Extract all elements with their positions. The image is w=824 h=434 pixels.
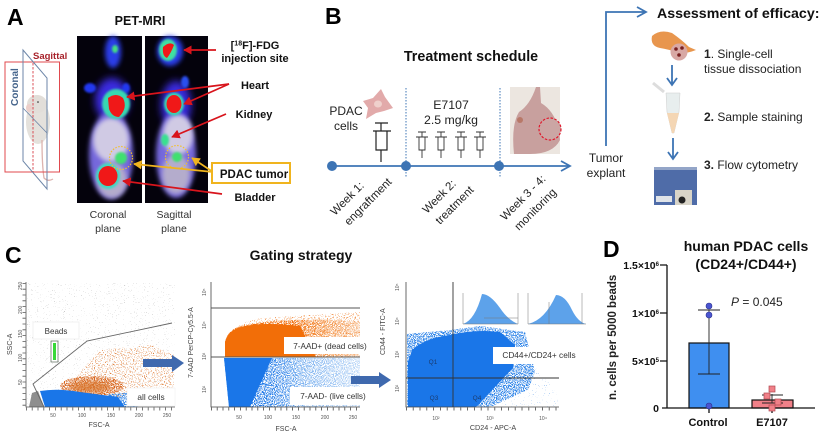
label: Bladder: Bladder [235, 192, 276, 204]
inset histograms [463, 293, 586, 324]
label A: A [7, 4, 24, 30]
axis tick labels: 6 [656, 310, 660, 316]
step 1 text: 1. Single-cell [704, 47, 773, 61]
label: Week 1: Week 1: [329, 180, 367, 218]
label: E7107 dose: E7107 [433, 98, 469, 112]
label: Week 1: engraftment [343, 176, 395, 228]
label: PDAC cells: PDAC [329, 104, 363, 118]
icon: pancreas with tumor [652, 32, 696, 60]
axis labels [7, 281, 171, 429]
annotation: P value: P = 0.045 [731, 295, 783, 309]
callout: PDAC tumor: PDAC tumor [220, 169, 289, 181]
quadrant labels: Q3 [430, 395, 439, 402]
error bars [698, 310, 783, 403]
label: CD44+/CD24+ cells: CD44+/CD24+ cells [502, 350, 576, 360]
axis labels: 10³ [486, 416, 494, 422]
image: coronal PET-MRI [77, 36, 142, 203]
axis labels: 50 [236, 415, 242, 421]
quadrant labels: Q1 [429, 359, 438, 366]
icons: four treatment syringes [416, 132, 486, 158]
panel: A PET-MRI [5, 4, 290, 235]
category labels: Control [688, 417, 728, 429]
label: injection site: [ [231, 40, 234, 52]
label C: C [5, 242, 22, 268]
label: 7-AAD- live cells: 7-AAD- (live cells) [300, 392, 366, 401]
icon: PDAC cell [363, 89, 393, 119]
caption: coronal plane: Coronal [90, 209, 126, 221]
quadrant labels [429, 359, 482, 402]
heading: PET-MRI: PET-MRI [115, 14, 165, 28]
label: injection site: 18 [234, 40, 242, 48]
bar: E7107 [752, 400, 793, 408]
chart title: (CD24+/CD44+) [695, 256, 797, 272]
axis labels: 150 [18, 329, 24, 338]
gate box: beads [33, 322, 79, 362]
caption: sagittal plane: Sagittal [156, 209, 192, 221]
axis labels: 50 [50, 413, 56, 419]
axis labels: 250 [163, 413, 171, 419]
axis tick labels: 0 [653, 403, 659, 415]
label B: B [325, 3, 342, 29]
icon: mouse with coronal and sagittal planes [5, 50, 67, 189]
axis labels: 200 [135, 413, 143, 419]
bar: Control [689, 343, 729, 408]
axis labels: FSC-A [276, 426, 297, 433]
axis labels: 100 [264, 415, 272, 421]
caption: sagittal plane: plane [161, 223, 187, 235]
axis labels: 10³ [395, 350, 401, 358]
label: Week 2: treatment [434, 184, 477, 227]
axis labels: CD24 - APC-A [470, 423, 516, 432]
axis labels: 250 [18, 281, 24, 290]
axis labels: 10⁵ [395, 283, 401, 291]
chart title: human PDAC cells [684, 238, 808, 254]
label: Week 3-4 [499, 173, 559, 233]
label: injection site: injection site [221, 53, 289, 65]
axis labels: SSC-A [7, 333, 14, 355]
callout: PDAC tumor [212, 163, 290, 183]
label: all cells [127, 388, 175, 406]
y axis title: n. cells per 5000 beads [607, 275, 619, 400]
label: Sagittal plane: Sagittal [33, 51, 67, 62]
panel: D bar chart [603, 236, 815, 429]
arrow: explant to assessment [606, 7, 646, 146]
arrow: step 1 to 2 [667, 65, 677, 85]
axis labels: 10² [432, 416, 440, 422]
label: 7-AAD- live cells [290, 387, 376, 405]
axis labels: 150 [292, 415, 300, 421]
caption: coronal plane: plane [95, 223, 121, 235]
label: CD44+/CD24+ cells [493, 347, 585, 364]
axis tick labels [623, 260, 660, 415]
icon: flow cytometer [654, 167, 697, 205]
axis labels: 10³ [202, 352, 208, 360]
plot: 7-AAD vs FSC [188, 282, 376, 433]
axis labels: 50 [18, 379, 24, 385]
label D: D [603, 236, 620, 262]
arrow: plot 1 to 2 [143, 355, 184, 372]
step 3 text: 3. Flow cytometry [704, 158, 798, 172]
panel: C gating strategy [5, 242, 586, 433]
label: Week 2: Week 2: [421, 178, 459, 216]
axis labels: 250 [349, 415, 357, 421]
axis labels: 10⁴ [202, 321, 208, 329]
label: Week 2 [421, 178, 477, 227]
heading: Treatment schedule: Treatment schedule [404, 49, 538, 65]
data points: E7107 [764, 386, 781, 411]
label: all cells: all cells [137, 392, 165, 402]
quadrant labels: Q4 [473, 395, 482, 402]
axis labels: CD44 - FITC-A [380, 308, 387, 355]
axis labels: 100 [78, 413, 86, 419]
axis tick labels: 1.5×10 [623, 260, 656, 272]
axis labels: 10⁵ [202, 288, 208, 296]
axes [660, 265, 815, 413]
data points: Control [706, 303, 712, 409]
panel: B treatment schedule [325, 3, 570, 233]
axis labels: 7-AAD PerCP-Cy5.5-A [188, 307, 195, 378]
label: Kidney: Kidney [236, 109, 273, 121]
category labels [688, 417, 788, 429]
heading: Assessment of efficacy: Assessment of efficacy: [657, 6, 819, 22]
axis labels [188, 288, 357, 433]
image: sagittal PET-MRI [145, 36, 208, 203]
axis labels: 150 [107, 413, 115, 419]
arrow: step 2 to 3 [668, 138, 678, 159]
step 2 text: 2. Sample staining [704, 110, 803, 124]
axis labels: 10⁴ [539, 416, 547, 422]
label: PDAC cells: cells [334, 119, 358, 133]
axis labels: FSC-A [88, 422, 110, 429]
plot: CD44 vs CD24 [380, 282, 586, 432]
label: injection site: F]-FDG [242, 40, 279, 52]
label: 7-AAD+ dead cells [284, 337, 373, 354]
label: Week 3-4: monitoring [513, 187, 559, 233]
axis labels: 10² [395, 384, 401, 392]
step 1 text: tissue dissociation [704, 62, 801, 76]
axis labels: 10² [202, 385, 208, 393]
icon: large syringe [373, 123, 391, 162]
label: Week 3-4: Week 3 - 4: [499, 173, 549, 223]
label: Heart: Heart [241, 80, 269, 92]
axis tick labels: 5 [656, 358, 660, 364]
axis labels: 10⁴ [395, 317, 401, 325]
axis labels [380, 283, 547, 432]
axis labels: 200 [18, 305, 24, 314]
arrows: red organ pointers [123, 50, 229, 194]
axis tick labels: 6 [656, 262, 660, 268]
category labels: E7107 [756, 417, 788, 429]
label: Tumor explant: Tumor [589, 151, 623, 165]
arrows: yellow tumor pointers [134, 158, 213, 172]
icon: sample tube [653, 83, 680, 133]
axis tick labels: 5×10 [632, 356, 656, 368]
heading: Gating strategy: Gating strategy [250, 247, 353, 263]
label: Coronal plane: Coronal [10, 68, 21, 106]
plot: SSC vs FSC [7, 281, 175, 429]
label: Tumor explant: explant [587, 166, 626, 180]
label: 7-AAD+ dead cells: 7-AAD+ (dead cells) [293, 342, 367, 351]
timeline [327, 88, 570, 178]
arrow: plot 2 to 3 [351, 372, 391, 388]
axis tick labels: 1×10 [632, 308, 656, 320]
panel: tumor explant and assessment of efficacy [587, 6, 819, 205]
axis labels: 100 [18, 353, 24, 362]
photo: mouse with tumor [510, 87, 561, 154]
label: E7107 dose: 2.5 mg/kg [424, 113, 478, 127]
gate box: beads: Beads [45, 327, 67, 336]
axis labels: 200 [321, 415, 329, 421]
